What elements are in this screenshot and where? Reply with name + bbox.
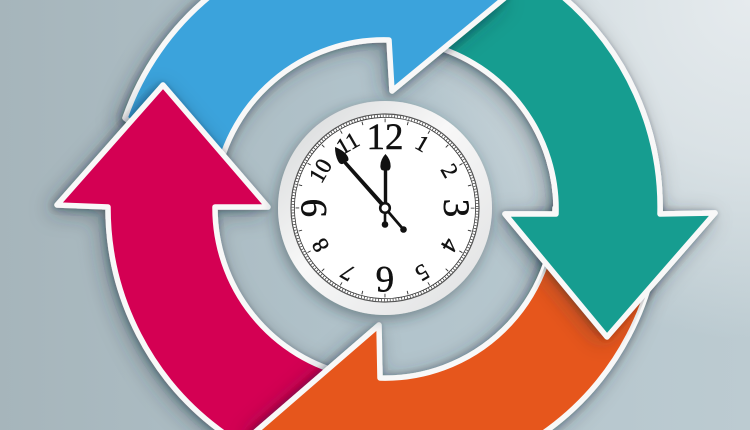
clock: [278, 101, 492, 315]
centre pin: [380, 203, 390, 213]
arrow: teal head shadow on orange: [536, 266, 646, 350]
clock numerals: 8: [307, 234, 334, 256]
arrow: teal head overlapping orange: [502, 120, 718, 340]
arrow: orange: [253, 208, 660, 430]
clock numerals: 4: [436, 234, 463, 257]
clock face: [291, 114, 479, 302]
clock numerals: 1: [411, 130, 433, 157]
clock numerals: 9: [294, 199, 335, 217]
clock numerals: 11: [332, 127, 364, 160]
arrow: teal: [430, 0, 715, 337]
minute hand: [335, 147, 407, 233]
hour hand: [380, 154, 391, 228]
clock numerals: 2: [436, 160, 463, 182]
clock numerals: 7: [337, 259, 359, 286]
clock numerals: 5: [411, 259, 433, 286]
arrow: red: [57, 85, 350, 430]
minute track: [293, 116, 477, 300]
clock bezel: [278, 101, 492, 315]
clock numerals: [294, 117, 476, 299]
clock numerals: 10: [304, 155, 337, 187]
clock numerals: 3: [435, 199, 476, 217]
arrow: blue: [125, 0, 507, 190]
clock numerals: 6: [376, 258, 394, 299]
clock numerals: 12: [366, 117, 404, 158]
